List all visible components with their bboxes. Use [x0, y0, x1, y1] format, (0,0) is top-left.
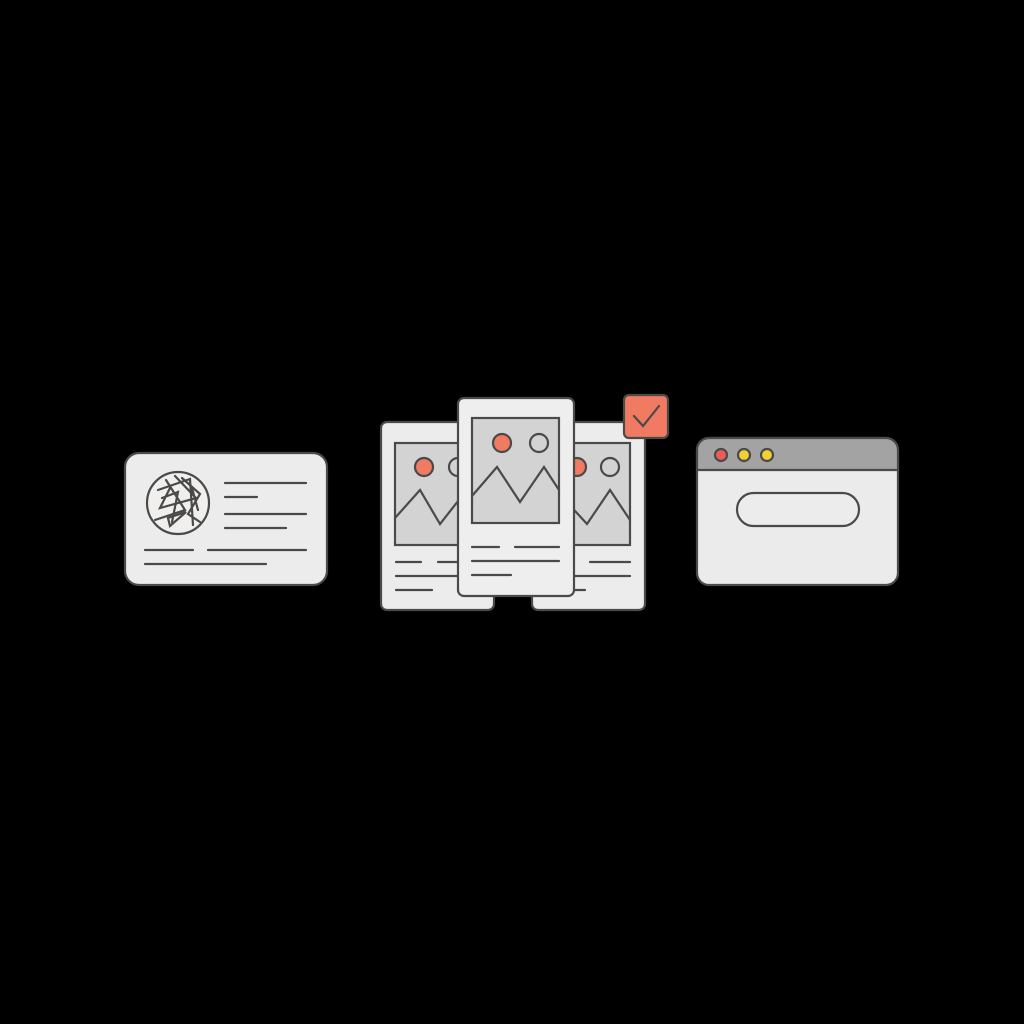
id card	[125, 453, 327, 585]
window dots	[715, 449, 773, 461]
pill button	[737, 493, 859, 526]
phone stack	[381, 395, 668, 610]
text lines	[145, 483, 306, 564]
icon: emblem	[147, 472, 209, 534]
browser window	[697, 438, 898, 585]
left phone	[381, 422, 494, 610]
middle phone	[458, 398, 574, 596]
icon: checkbox	[624, 395, 668, 438]
right phone	[532, 422, 645, 610]
